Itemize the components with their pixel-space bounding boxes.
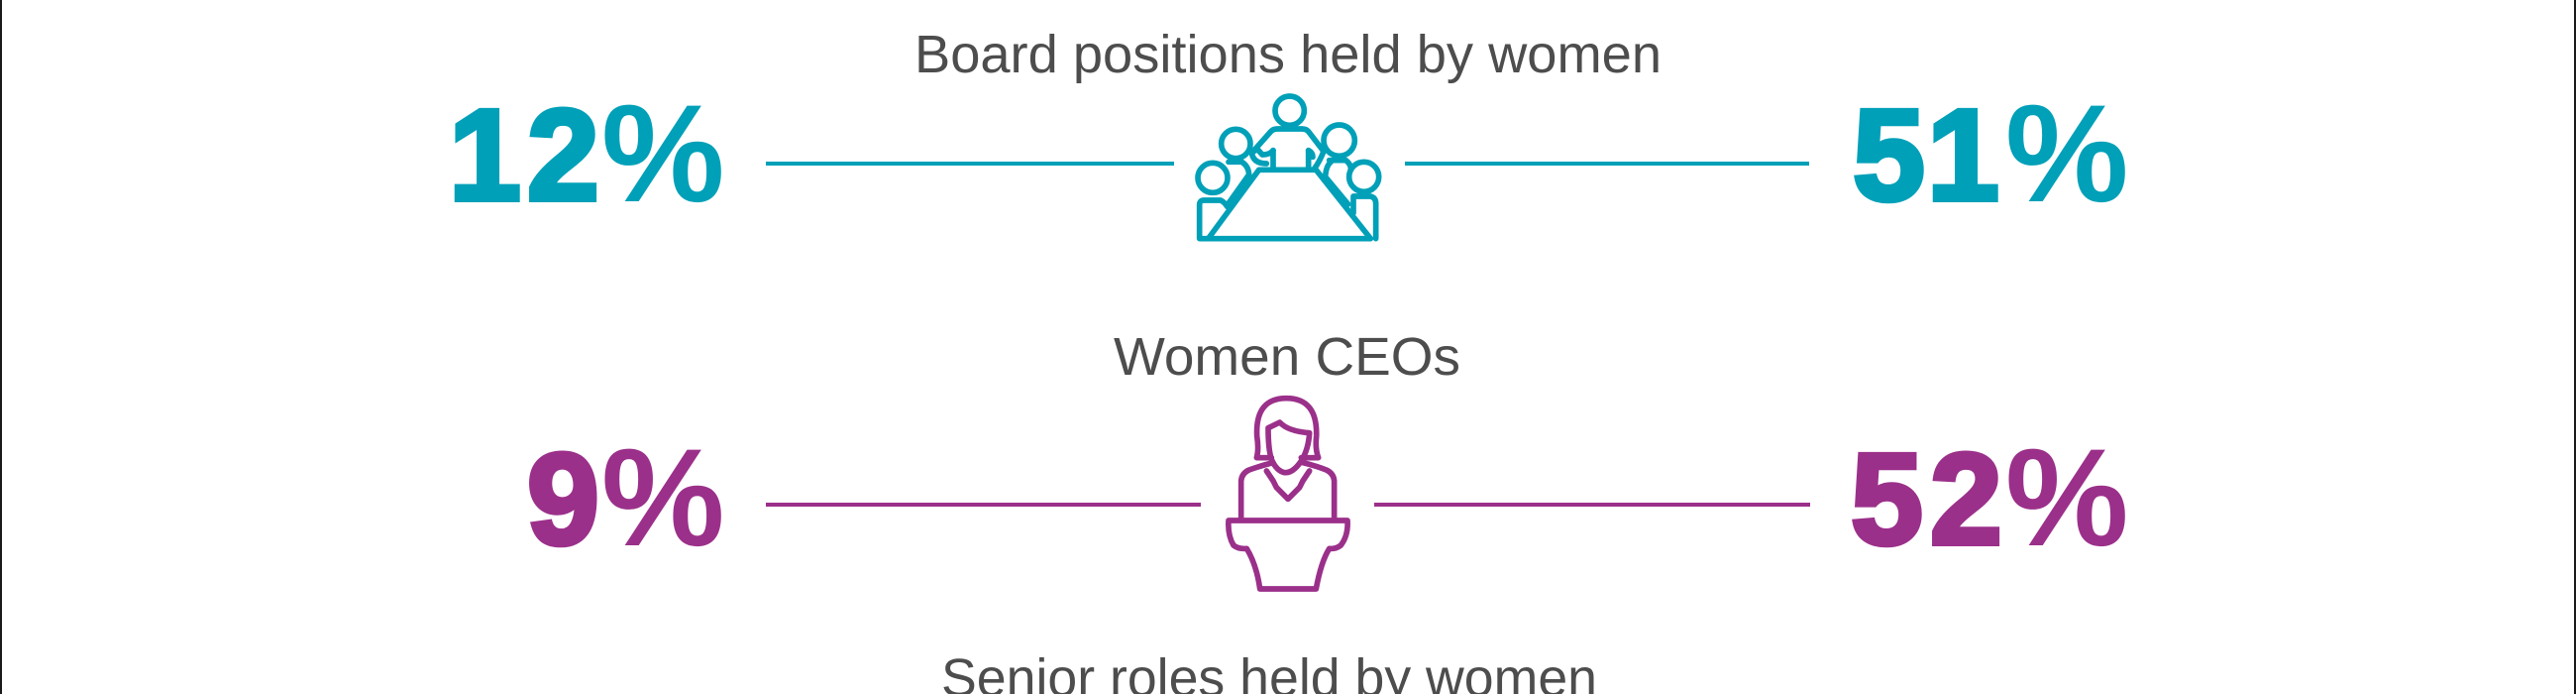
stat: 51% board positions: % <box>2005 75 2128 231</box>
icon: boardroom table with people <box>1198 96 1379 239</box>
stat: 9% women CEOs: 9 <box>527 426 599 571</box>
connector line: teal right <box>1405 162 1809 166</box>
connector line: purple left <box>766 503 1201 507</box>
stat: 12% board positions: 12 <box>449 81 599 228</box>
stat: 12% board positions <box>449 75 724 231</box>
stat: 52% women CEOs: 52 <box>1851 426 2002 571</box>
stat: 9% women CEOs <box>527 419 724 575</box>
heading: board positions: Board positions held by women <box>914 25 1662 84</box>
stat: 12% board positions: % <box>601 75 724 231</box>
icon: woman at podium <box>1229 399 1347 589</box>
stat: 51% board positions <box>1853 75 2128 231</box>
stat: 51% board positions: 51 <box>1853 81 1999 228</box>
stat: 52% women CEOs <box>1851 419 2128 575</box>
connector line: teal left <box>766 162 1174 166</box>
connector line: purple right <box>1374 503 1810 507</box>
stat: 9% women CEOs: % <box>601 419 724 575</box>
heading: women CEOs: Women CEOs <box>1114 327 1460 387</box>
stat: 52% women CEOs: % <box>2005 419 2128 575</box>
